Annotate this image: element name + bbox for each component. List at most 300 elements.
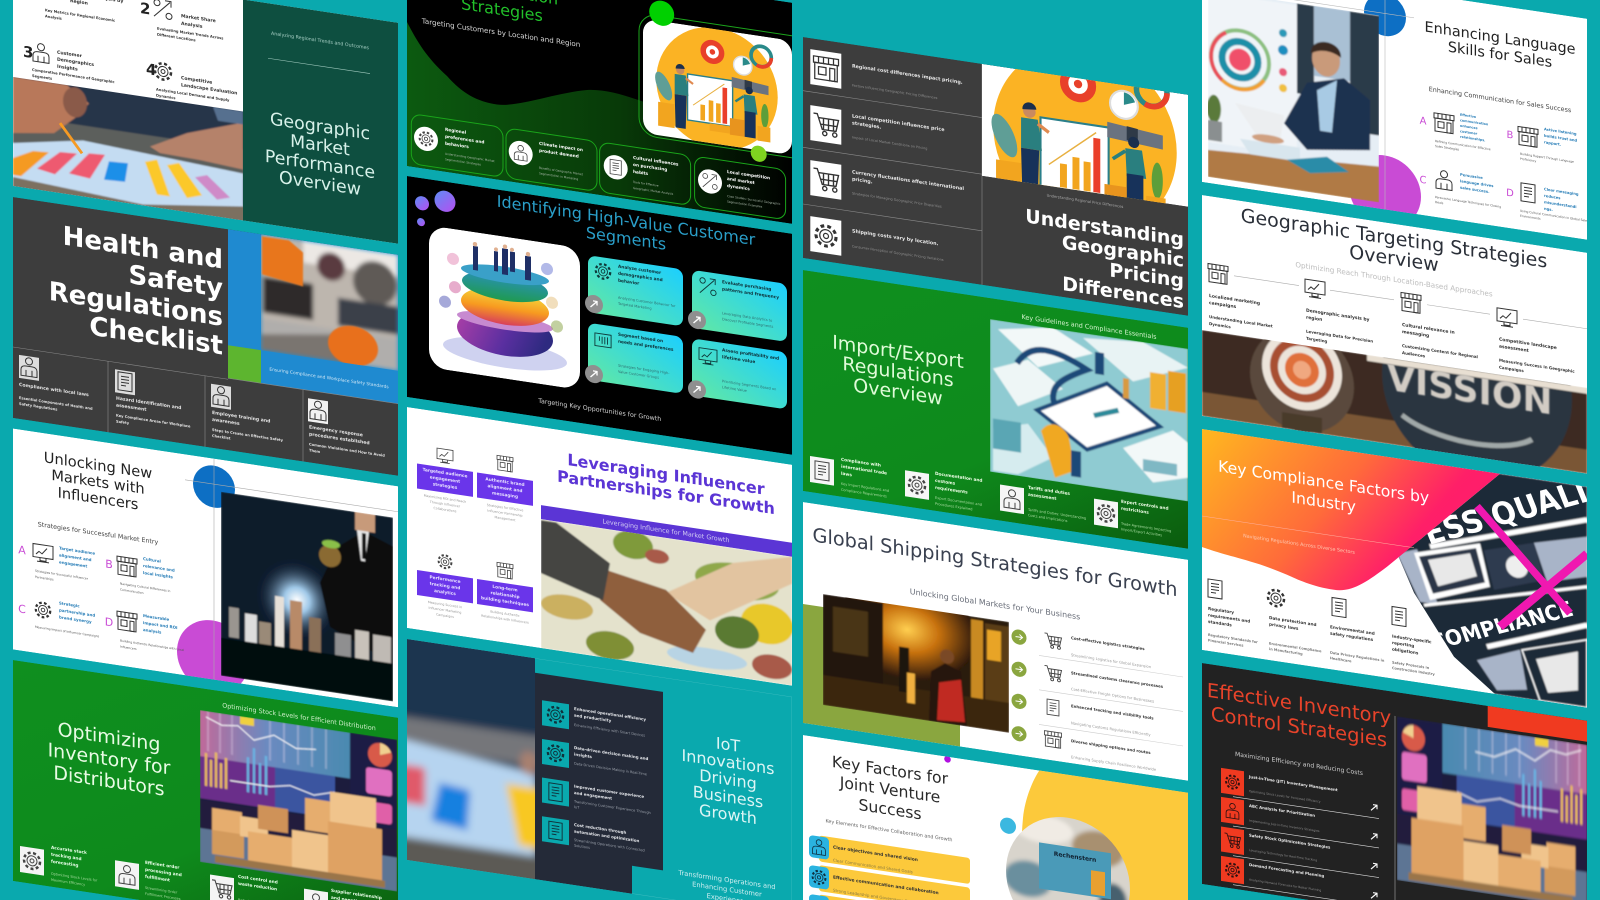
item: performance tracking: Measuring Success in (428, 600, 462, 609)
row 4: Analyzing Demand Forecasts for Better Planning (1249, 878, 1321, 892)
item 4 text: Analyzing Local Demand and Supply (156, 87, 230, 103)
panel: Key Factors for Joint Venture Success (803, 734, 1188, 900)
row: regional cost (810, 49, 963, 107)
title: Key Factors for (832, 752, 949, 788)
item 4: Import/Export Activities (1121, 527, 1162, 537)
item C (1420, 167, 1501, 214)
card: analyze customers: Analyzing Customer Behavior for (618, 296, 675, 308)
item 3: awareness (212, 417, 240, 427)
item 1: Localized marketing (1209, 294, 1260, 307)
photo: compliance tiles (1382, 428, 1600, 715)
title: Skills for Sales (1448, 40, 1552, 71)
panel: Geographic Segmentation Strategies (407, 0, 809, 226)
item A: relationships. (1460, 135, 1485, 143)
item B: B (105, 557, 113, 571)
item 4: Trade Agreements Impacting (1121, 522, 1171, 533)
row 1 (809, 834, 970, 884)
row 3 (1012, 693, 1154, 738)
title: Markets with (51, 467, 145, 498)
item 2: Demographic analysis by (1306, 309, 1369, 323)
item 2 text: Analysis (181, 21, 203, 30)
item D: misunderstandi (1544, 200, 1577, 209)
item 2: customs (935, 478, 956, 487)
row 2: Data-driven decision making and (574, 745, 648, 761)
item 1: Essential Components of Health and (19, 396, 93, 411)
card 3 (600, 142, 691, 206)
subtitle: Unlocking Global Markets for Your Business (910, 587, 1080, 622)
item A: communication (1460, 118, 1489, 127)
row 2 (1012, 660, 1164, 705)
item A (18, 542, 95, 581)
band (541, 505, 792, 557)
item 2 (115, 369, 190, 428)
item A: alignment and (59, 552, 92, 562)
row 1 (1012, 626, 1152, 669)
row 3 (809, 893, 970, 900)
card 1: Segmentation Strategies (445, 157, 481, 167)
photo: man with laptop (1208, 0, 1379, 202)
row 1: Cost-effective logistics strategies (1071, 635, 1145, 651)
title: Distributors (53, 761, 165, 801)
row 2: insights (574, 752, 593, 759)
card 4: and market (727, 176, 755, 186)
item 3: Environmental and (1330, 624, 1375, 636)
item D: Building Authentic Relationships with Local (120, 639, 184, 652)
item 2: Leveraging Data for Precision (1306, 329, 1373, 344)
item 3: Audiences (1402, 350, 1426, 359)
item 1: Compliance Requirements (841, 488, 887, 499)
title: IoT (716, 733, 740, 756)
dividers (803, 37, 982, 285)
item B (106, 556, 174, 594)
title: Innovations (682, 746, 774, 779)
title: Leveraging Influencer (567, 450, 765, 499)
panel: Identifying High-Value Customer Segments (407, 176, 792, 455)
row 1: Clear Communication and Shared Goals (833, 858, 913, 874)
item B: Building Rapport Through Language (1520, 152, 1574, 164)
item: long-term relationships: building techniques (481, 595, 529, 608)
item 1 text: Key Metrics for Regional Economic (45, 8, 115, 23)
photo: dashboard and boxes (200, 710, 397, 892)
item: long-term relationships: relationship (490, 590, 520, 600)
pink cross (1477, 506, 1587, 640)
row 4 (1221, 856, 1377, 900)
panel: Import/Export Regulations Overview (803, 270, 1188, 549)
card 4: Case Studies: Successful Geographic (727, 194, 780, 206)
subtitle: Understanding Regional Price Differences (1047, 194, 1123, 209)
item C: language drives (1460, 179, 1494, 188)
item 4 (1497, 308, 1575, 381)
item: authentic brand: messaging (492, 490, 518, 500)
item 2: Targeting (1306, 336, 1328, 344)
panel: IoT Innovations Driving Business Growth (397, 628, 792, 900)
item 1: Compliance with local laws (19, 383, 89, 398)
title: Identifying High-Value Customer (497, 192, 756, 249)
row: regional cost: Regional cost differences impact pricing. (852, 63, 963, 86)
item: targeted audience: Collaborations (434, 506, 457, 513)
item C: Persuasive (1460, 173, 1483, 180)
subtitle: Strategies for Successful Market Entry (38, 521, 158, 546)
subtitle: Transforming Operations and (677, 869, 776, 891)
item B: Active listening (1544, 127, 1576, 136)
item 1: Maximum Efficiency (51, 878, 85, 887)
list panel (535, 673, 663, 898)
title: Safety (128, 260, 223, 304)
item A: A (1420, 116, 1427, 128)
row 1 (542, 700, 646, 741)
item A: Refining Communication for Effective (1435, 139, 1491, 151)
decorative dots (415, 186, 456, 231)
title: Overview (853, 374, 943, 410)
item A: Target audience (59, 545, 95, 556)
subtitle: Analyzing Regional Trends and Outcomes (271, 31, 370, 51)
card 2 (506, 128, 597, 192)
subtitle: Targeting Customers by Location and Region (421, 16, 580, 49)
row: local competition (810, 105, 945, 160)
row: shipping (810, 216, 944, 271)
item 1: tracking and (51, 852, 82, 862)
item 4: procedures established (309, 431, 370, 446)
title: Influencers (58, 484, 138, 513)
row 2: Implementing Just-in-Time Inventory Strategies (1249, 819, 1320, 833)
card: purchasing patterns: Evaluate purchasing (722, 280, 771, 293)
item 2: requirements (935, 485, 968, 496)
item 1: campaigns (1209, 300, 1237, 310)
item C: Measuring Impact of Influencer Campaigns (35, 625, 100, 638)
image frame (639, 13, 809, 160)
row: currency (810, 160, 964, 218)
item 1 (20, 840, 98, 889)
item: performance tracking: tracking and (430, 581, 460, 591)
item 2: Safety (116, 419, 130, 425)
photo: businessman and city (221, 492, 393, 702)
panel: Understanding Geographic Pricing Differences (803, 5, 1188, 316)
item 2 text: Evaluating Market Trends Across (157, 27, 223, 41)
title: Market (290, 132, 350, 161)
row: currency: Strategies for Managing Geographic Price Disparities (852, 191, 942, 209)
item 4: assessment (1499, 344, 1530, 354)
card 4: dynamics (727, 183, 750, 192)
item: long-term relationships: Relationships with Influencers (481, 614, 529, 625)
panel: Health and Safety Regulations Checklist (13, 197, 398, 476)
item A (1420, 107, 1491, 156)
row 4: Diverse shipping options and routes (1071, 738, 1151, 755)
photo: dashboard and boxes mirrored (1397, 716, 1587, 900)
card 2: Benefits of Geographic Market (539, 166, 583, 176)
divider line (268, 58, 370, 74)
row: local competition: Local competition influences price (852, 114, 944, 133)
row 1: and productivity (574, 713, 612, 723)
subtitle: Maximizing Efficiency and Reducing Costs (1235, 751, 1363, 777)
title: Segments (586, 223, 666, 254)
item: long-term relationships (477, 559, 533, 625)
item 4 (308, 398, 385, 457)
card: profitability: Assess profitability and (722, 348, 779, 362)
item A: Effective (1460, 113, 1476, 119)
row 1: Just-in-Time (JIT) Inventory Management (1248, 774, 1338, 792)
row 3: Safety Stock Optimization Strategies (1249, 833, 1331, 850)
item 1 text: Analysis (45, 14, 62, 21)
item 3 text: Segments (32, 74, 52, 81)
item 3: safety regulations (1330, 631, 1374, 642)
card 1 (411, 114, 503, 177)
panel: title side (243, 0, 398, 244)
item 4: Industry-specific (1392, 634, 1431, 644)
row 1: Clear objectives and shared vision (833, 845, 918, 863)
item 3 text: Insights (57, 64, 78, 73)
decorative circle: blue (1364, 0, 1406, 39)
title: Joint Venture (839, 773, 940, 807)
orange pink wave (1202, 429, 1500, 615)
item 3: messaging (1402, 329, 1429, 339)
item 2 text: Different Locations (157, 33, 196, 42)
item C: sales success. (1460, 186, 1490, 194)
item: authentic brand: Strategies for Effective (487, 503, 523, 512)
row 4: Enhancing Supply Chain Resilience Worldwide (1071, 755, 1157, 772)
item 1: Financial Services (1208, 638, 1243, 648)
card: profitability (688, 338, 787, 412)
title: Unlocking New (44, 449, 152, 482)
title: Geographic (270, 110, 370, 145)
item 1: Understanding Local Market (1209, 314, 1273, 329)
item 4 (1392, 606, 1436, 677)
card: needs and preferences: needs and preferences (618, 339, 674, 353)
photo: warehouse worker (823, 594, 1009, 733)
item 2: privacy laws (1269, 622, 1299, 631)
item 3 (1000, 481, 1086, 526)
card 1: Understanding Geographic Market (445, 152, 495, 163)
item 1: requirements and (1208, 612, 1250, 624)
item 4: Competitive landscape (1499, 338, 1557, 351)
color block: green (228, 345, 261, 383)
title: Control Strategies (1211, 702, 1387, 752)
item 3: Customizing Content for Regional (1402, 343, 1479, 359)
item: targeted audience: Targeted audience (423, 467, 467, 480)
title: Overview (279, 168, 361, 200)
card 1: Regional (445, 128, 466, 136)
item 4 (1094, 495, 1171, 539)
card: needs and preferences: Segment based on (618, 333, 663, 344)
item 4: Construction Industry (1392, 666, 1436, 677)
item C: Persuasive Language Techniques for Closing (1435, 195, 1501, 209)
card: needs and preferences (585, 322, 683, 396)
subtitle: Key Guidelines and Compliance Essentials (1022, 313, 1157, 341)
item A: Strategies for Successful Influencer (35, 569, 88, 581)
item A: Sales Strategies (1435, 144, 1460, 152)
card: analyze customers: demographics and (618, 271, 663, 283)
photo: hand pointing at chart (13, 77, 243, 220)
title: Success (858, 795, 922, 823)
item D (1506, 181, 1589, 228)
item B: local insights (143, 570, 173, 580)
title: Partnerships for Growth (557, 467, 775, 518)
item: authentic brand: Management (495, 515, 516, 522)
card 3: Tools for Effective (633, 180, 659, 188)
panel: Key Compliance Factors by Industry (1202, 401, 1600, 715)
dot: blue (1000, 817, 1016, 835)
item 2: Key Compliance Areas for Workplace (116, 413, 191, 429)
row 3: Improved customer experience (574, 784, 644, 799)
row 3: IoT (574, 805, 580, 810)
item 3 (210, 870, 278, 900)
card: analyze customers: Analyze customer (618, 265, 661, 276)
item 1 (1208, 264, 1273, 336)
row 4 (1012, 725, 1157, 772)
item D: D (105, 615, 113, 630)
row 2 (809, 864, 970, 900)
item D: analysis (143, 627, 162, 635)
item A: A (18, 543, 26, 557)
item B: rapport. (1544, 140, 1562, 147)
item: targeted audience: engagement (430, 474, 460, 485)
item 3: Data Privacy Regulations in (1330, 651, 1385, 663)
row 2: Data-Driven Decision Making in Real-Time (574, 762, 647, 776)
card 3: Geographic Market Analysis (633, 186, 674, 196)
item: performance tracking: analytics (434, 588, 456, 597)
decorative circle: green (649, 0, 674, 28)
row: shipping: Shipping costs vary by location. (852, 228, 939, 247)
item 2 (905, 466, 983, 513)
item 2: fulfillment (145, 874, 170, 884)
item C: brand synergy (59, 614, 92, 624)
card 3: habits (633, 169, 649, 177)
item 2: processing and (145, 867, 182, 878)
item 2 (1305, 279, 1373, 351)
item 4: obligations (1392, 647, 1419, 656)
green wave (407, 22, 792, 224)
icon: trend percent (154, 0, 172, 20)
item B: Navigating Cultural Differences in (120, 582, 170, 593)
color block: olive (803, 604, 960, 747)
item 2 (115, 855, 182, 900)
row: local competition: strategies. (852, 120, 881, 131)
row 2: Cost-Effective Freight Options for Businesses (1071, 687, 1154, 704)
row 4: Demand Forecasting and Planning (1249, 862, 1324, 878)
title: Differences (1062, 272, 1184, 313)
item: targeted audience (417, 445, 473, 516)
dot: purple (944, 755, 951, 763)
title: Driving (699, 766, 757, 793)
title: Optimizing (58, 718, 160, 756)
item: performance tracking (417, 551, 473, 622)
item 2: Export Documentation and (935, 496, 982, 507)
subtitle: Navigating Regulations Across Diverse Sectors (1243, 533, 1355, 556)
title: Growth (699, 800, 757, 828)
item B (1507, 122, 1578, 169)
item B: relevance and (143, 563, 175, 573)
card: needs and preferences: Strategies for Engaging High- (618, 364, 669, 375)
item D (106, 610, 184, 652)
item 2: in Manufacturing (1269, 647, 1303, 656)
item 3: Healthcare (1330, 656, 1352, 664)
item 1: Compliance with (841, 458, 881, 469)
caption: Ensuring Compliance and Workplace Safety Standards (269, 366, 389, 390)
item 1: Dynamics (1209, 321, 1231, 329)
row 3 (1221, 827, 1377, 875)
row 2: Effective communication and collaboration (833, 875, 939, 896)
item 3 text: Demographics (57, 57, 94, 68)
item: performance tracking: Campaigns (436, 612, 454, 619)
item D: reduces (1544, 194, 1561, 200)
row 4: Cost reduction through (574, 822, 626, 835)
decorative circle: purple (1349, 150, 1421, 233)
image: analysts illustration (643, 17, 792, 160)
item: authentic brand: Influencer Partnership (487, 509, 523, 518)
title: Geographic (1062, 231, 1184, 272)
card 3: Cultural influences (633, 156, 678, 168)
item 4: Safety Protocols in (1392, 661, 1430, 670)
row: currency: Currency fluctuations affect international (852, 170, 964, 192)
item D: Clear messaging (1544, 187, 1579, 196)
item 4: Campaigns (1499, 365, 1524, 373)
row 3: and engagement (574, 790, 612, 801)
item B: Proficiency (1520, 157, 1536, 163)
row 2: Streamlined customs clearance processes (1071, 670, 1164, 689)
row 2: ABC Analysis for Prioritization (1249, 803, 1315, 818)
yellow shape (1022, 767, 1188, 900)
title: Checklist (89, 312, 223, 362)
card: purchasing patterns (688, 269, 787, 342)
item: performance tracking: Performance (430, 574, 461, 585)
panel: Geographic Targeting Strategies Overview (1202, 195, 1587, 498)
item 2: assessment (116, 402, 147, 413)
subtitle: Optimizing Stock Levels for Efficient Distribution (222, 701, 376, 732)
title: Health and (63, 222, 223, 275)
image: analysts illustration (982, 64, 1188, 207)
card 2: Segmentation in Marketing (539, 171, 578, 181)
panel: Leveraging Influencer Partnerships for Growth (407, 407, 793, 687)
item 1: international trade (841, 464, 887, 477)
item 3 text: Comparative Performance of Geographic (32, 68, 115, 84)
photo: isometric documents (990, 319, 1188, 502)
title: Business (693, 782, 763, 812)
item 4: restrictions (1121, 506, 1149, 516)
photo: blurred chart (407, 639, 535, 880)
title: Regulations (842, 352, 954, 392)
item 1: standards (1208, 619, 1232, 628)
card: purchasing patterns: Leveraging Data Analytics to (722, 311, 772, 323)
image: segment funnel (429, 225, 580, 390)
card 4: Segmentation Examples (727, 200, 763, 209)
grid lines (13, 346, 398, 462)
item: long-term relationships: Building Authentic (490, 610, 520, 618)
item 4 text: Landscape Evaluation (181, 82, 237, 97)
row 2 (542, 739, 649, 780)
item: targeted audience: strategies (433, 481, 458, 491)
subtitle: Key Elements for Effective Collaboration and Growth (825, 818, 953, 843)
title: Performance (265, 147, 375, 183)
item 3: Checklist (212, 434, 231, 441)
number 3: 3 (23, 43, 33, 62)
footer text: Targeting Key Opportunities for Growth (537, 398, 661, 423)
item 1: Regulatory (1208, 606, 1234, 615)
card: analyze customers: behavior (618, 278, 640, 287)
title: Inventory for (48, 738, 171, 780)
row 1: Streamlining Logistics for Global Expansion (1071, 653, 1152, 669)
card 4: Local competition (727, 170, 770, 181)
item 4: Measuring Success in Geographic (1499, 358, 1575, 374)
item 3 (211, 384, 283, 442)
card: analyze customers (585, 255, 683, 326)
item 4: Export controls and (1121, 500, 1169, 512)
item 1: Safety Regulations (19, 402, 57, 412)
row 3: Navigating Customs Regulations Efficiently (1071, 721, 1151, 737)
item 3: Cultural relevance in (1402, 323, 1455, 336)
item 1: Optimizing Stock Levels for (51, 872, 97, 883)
title: Import/Export (832, 330, 964, 373)
photo: safety workers (261, 234, 398, 371)
item 4: Emergency response (309, 425, 363, 438)
